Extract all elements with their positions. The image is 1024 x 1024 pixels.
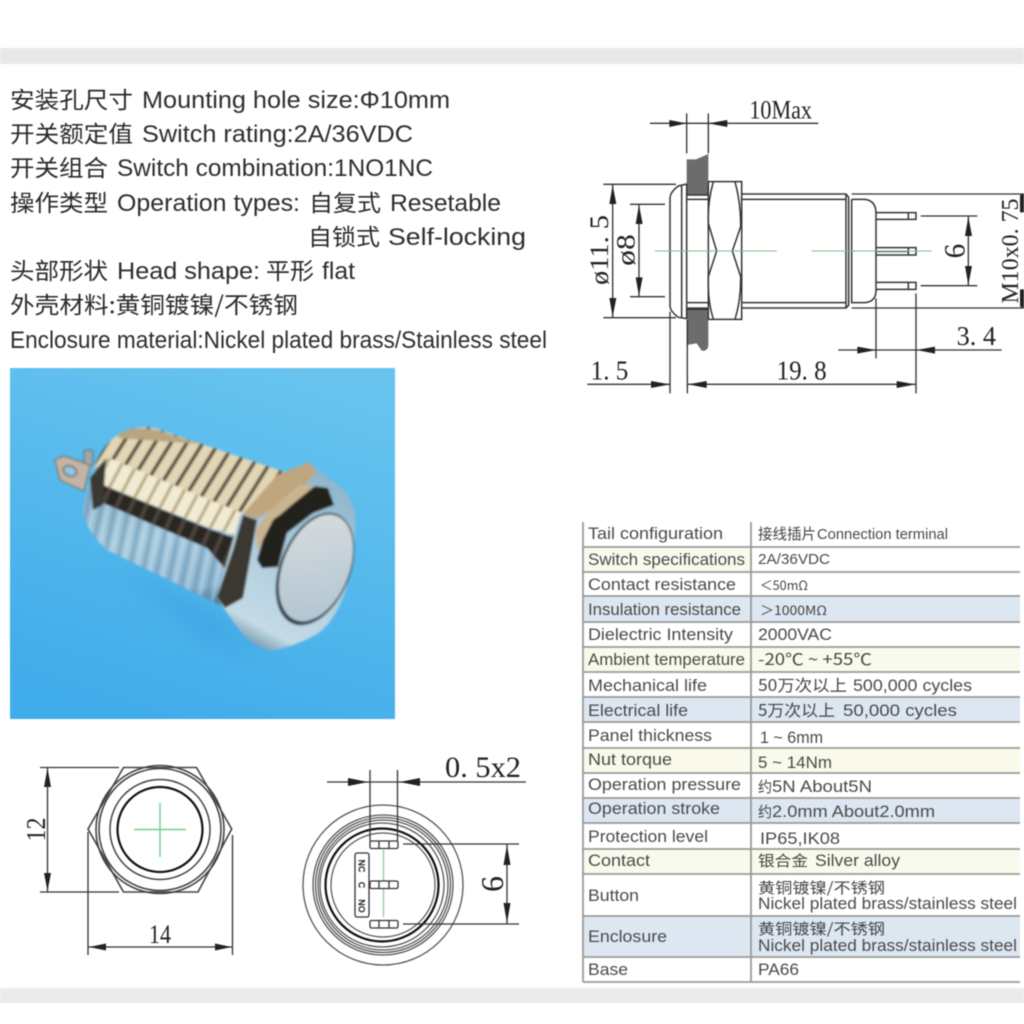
table row: switch specifications: Switch specifications (588, 550, 745, 569)
table row: button (588, 877, 1017, 913)
dimension: 14 (88, 832, 232, 955)
switch button face (260, 501, 370, 637)
table row: operation stroke: 2.0mm About2.0mm (772, 802, 935, 821)
table row: ambient temperature (588, 646, 872, 670)
table row: panel thickness: Panel thickness (588, 726, 712, 745)
green centre line (655, 249, 932, 252)
table row: nut torque: Nut torque (588, 750, 672, 769)
table row: operation stroke (588, 799, 935, 822)
table row: operation pressure: Operation pressure (588, 775, 741, 794)
table row: electrical life: 50,000 cycles (843, 701, 957, 720)
dimension: diameter 11.5: ø11. 5 (585, 215, 614, 285)
dimension: diameter 8 (612, 204, 665, 297)
table row: contact: Silver alloy (815, 851, 901, 870)
table row: switch specifications: 2A/36VDC (758, 551, 830, 568)
spec line: switch rating (10, 115, 413, 149)
table row: dielectric intensity (588, 625, 832, 644)
table grid lines (583, 522, 1020, 982)
table row: contact resistance: Contact resistance (588, 575, 736, 594)
table row: contact resistance (588, 575, 808, 594)
table row: electrical life: Electrical life (588, 701, 688, 720)
icon: terminal lug (55, 450, 93, 491)
switch head and hex flange (217, 462, 370, 651)
dimension: pin spacing 6 (921, 216, 977, 286)
table row: base: Base (588, 960, 628, 979)
table row: operation pressure: 5N About5N (772, 777, 872, 796)
dimension: 6: 6 (474, 876, 510, 892)
table row: ambient temperature: Ambient temperature (588, 650, 745, 669)
table row: mechanical life: Mechanical life (588, 676, 707, 695)
table row: electrical life (588, 697, 957, 721)
green centre line (382, 850, 384, 917)
green centre cross (134, 803, 186, 857)
table row: enclosure: 黄铜镀镍/不锈钢 (758, 918, 885, 939)
spec line: switch combination: Switch combination:1NO1NC (117, 155, 433, 182)
table row: contact (588, 850, 901, 871)
table row: protection level (588, 827, 840, 848)
table row: tail configuration: 接线插片 (758, 523, 816, 544)
dimension: 10Max: 10Max (749, 95, 812, 125)
spec line: mounting hole size (10, 81, 450, 115)
spec line: self-locking: Self-locking (388, 224, 526, 251)
spec line: switch combination: 开关组合 (10, 149, 108, 183)
table row shading (584, 547, 1020, 957)
table row: insulation resistance: ＞1000MΩ (760, 600, 827, 619)
table row: operation stroke: Operation stroke (588, 799, 720, 818)
hexagon nut outline (88, 768, 232, 892)
terminal label plate (355, 853, 369, 917)
table row: operation stroke: 约 (758, 801, 772, 822)
table row: tail configuration: Tail configuration (588, 524, 723, 543)
table row: operation pressure (588, 775, 872, 797)
specification table (583, 522, 1020, 982)
table row: enclosure: Enclosure (588, 927, 667, 946)
table row: electrical life: 5万次以上 (758, 697, 835, 721)
spec line: mounting hole size: Mounting hole size:Φ10mm (142, 87, 450, 114)
dimension: diameter 8: ø8 (612, 234, 641, 266)
table row: mechanical life: 500,000 cycles (853, 676, 972, 695)
spec line: mounting hole size: 安装孔尺寸 (10, 81, 133, 115)
dimension: 12: 12 (21, 818, 51, 842)
table row: base: PA66 (758, 960, 799, 979)
table row: nut torque (588, 750, 832, 772)
table row: mechanical life (588, 672, 972, 696)
table row: ambient temperature: -20℃ ~ +55℃ (758, 646, 872, 670)
table row: enclosure: Nickel plated brass/stainless steel (758, 936, 1017, 955)
table row: contact: 银合金 (758, 850, 808, 871)
table row: button: Nickel plated brass/stainless steel (758, 894, 1017, 913)
spec line: switch rating: Switch rating:2A/36VDC (142, 121, 413, 148)
bottom grey band (0, 988, 1024, 1003)
spec line: operation types resetable: Resetable (390, 190, 501, 217)
table row: enclosure (588, 918, 1017, 955)
dimension: 1.5 and 19.8: 19. 8 (777, 356, 827, 386)
table row: contact: Contact (588, 851, 650, 870)
terminal label plate: C (356, 882, 366, 889)
table row: protection level: IP65,IK08 (760, 829, 840, 848)
dimension: 0.5x2 (327, 751, 526, 841)
technical drawing: side view with dimensions (585, 95, 1024, 393)
technical drawing: front view hexagon (21, 766, 232, 955)
terminal label plate: NO (356, 899, 366, 913)
table row: switch specifications (588, 550, 830, 569)
spec line: self-locking: 自锁式 (308, 218, 380, 252)
table row: mechanical life: 50万次以上 (758, 672, 847, 696)
dimension: diameter 11.5 (585, 184, 676, 318)
dimension: 1.5 and 19.8: 1. 5 (591, 356, 628, 386)
spec line: switch combination (10, 149, 433, 183)
concentric head rings (96, 766, 224, 894)
table row: insulation resistance (588, 600, 827, 619)
spec line: operation types resetable: 自复式 (309, 184, 381, 218)
dimension: thread M10x0.75: M10x0. 75 (998, 198, 1024, 303)
table row: protection level: Protection level (588, 827, 708, 846)
dimension: 6 (403, 844, 519, 924)
dimension: 1.5 and 19.8 (587, 312, 916, 393)
panel cross section (687, 154, 708, 351)
switch illustration (55, 425, 370, 651)
spec line: enclosure material english: Enclosure material:Nickel plated brass/Stainless steel (10, 327, 547, 354)
table row: contact resistance: ＜50mΩ (760, 575, 808, 594)
switch threaded body (80, 425, 295, 610)
dimension: 0.5x2: 0. 5x2 (445, 751, 521, 784)
spec line: self-locking (308, 218, 526, 252)
concentric rear rings (303, 805, 463, 965)
technical drawing: rear view with terminals (303, 751, 526, 965)
table row: panel thickness: 1 ~ 6mm (760, 728, 823, 747)
spec line: head shape (10, 252, 355, 286)
table row: nut torque: 5 ~ 14Nm (758, 753, 832, 772)
product photo: metal push button switch on blue background (10, 368, 395, 719)
table row: panel thickness (588, 726, 823, 747)
dimension: pin spacing 6: 6 (940, 244, 972, 258)
table row: dielectric intensity: Dielectric Intensity (588, 625, 734, 644)
terminal pins (370, 841, 398, 928)
table row: operation pressure: 约 (758, 776, 772, 797)
dimension: 10Max (650, 95, 818, 153)
spec line: head shape: 头部形状 (10, 252, 108, 286)
top grey band (0, 48, 1024, 64)
spec line: operation types resetable: 操作类型 (10, 184, 108, 218)
switch outline (670, 182, 916, 319)
dimension: 12 (21, 768, 119, 892)
terminal label plate: NC (356, 860, 366, 873)
table row: dielectric intensity: 2000VAC (758, 625, 832, 644)
table row: insulation resistance: Insulation resistance (588, 600, 741, 619)
table row: tail configuration: Connection terminal (817, 526, 948, 543)
table row: base (588, 960, 799, 979)
spec line: switch rating: 开关额定值 (10, 115, 133, 149)
spec line: enclosure material chinese: 外壳材料:黄铜镀镍/不锈钢 (10, 286, 298, 320)
table row: tail configuration (588, 523, 948, 544)
spec line: head shape: flat (322, 258, 355, 285)
dimension: 3.4 (838, 293, 1002, 393)
dimension: 3.4: 3. 4 (957, 321, 996, 351)
dimension: thread M10x0.75 (852, 194, 1024, 308)
dimension: 14: 14 (149, 920, 171, 949)
table row: button: 黄铜镀镍/不锈钢 (758, 877, 885, 898)
spec line: head shape: 平形 (266, 252, 314, 286)
text block: key specifications (10, 81, 547, 354)
table row: button: Button (588, 886, 639, 905)
spec line: operation types resetable: Operation types: (117, 190, 300, 217)
spec line: operation types resetable (10, 184, 501, 218)
spec line: head shape: Head shape: (117, 258, 260, 285)
